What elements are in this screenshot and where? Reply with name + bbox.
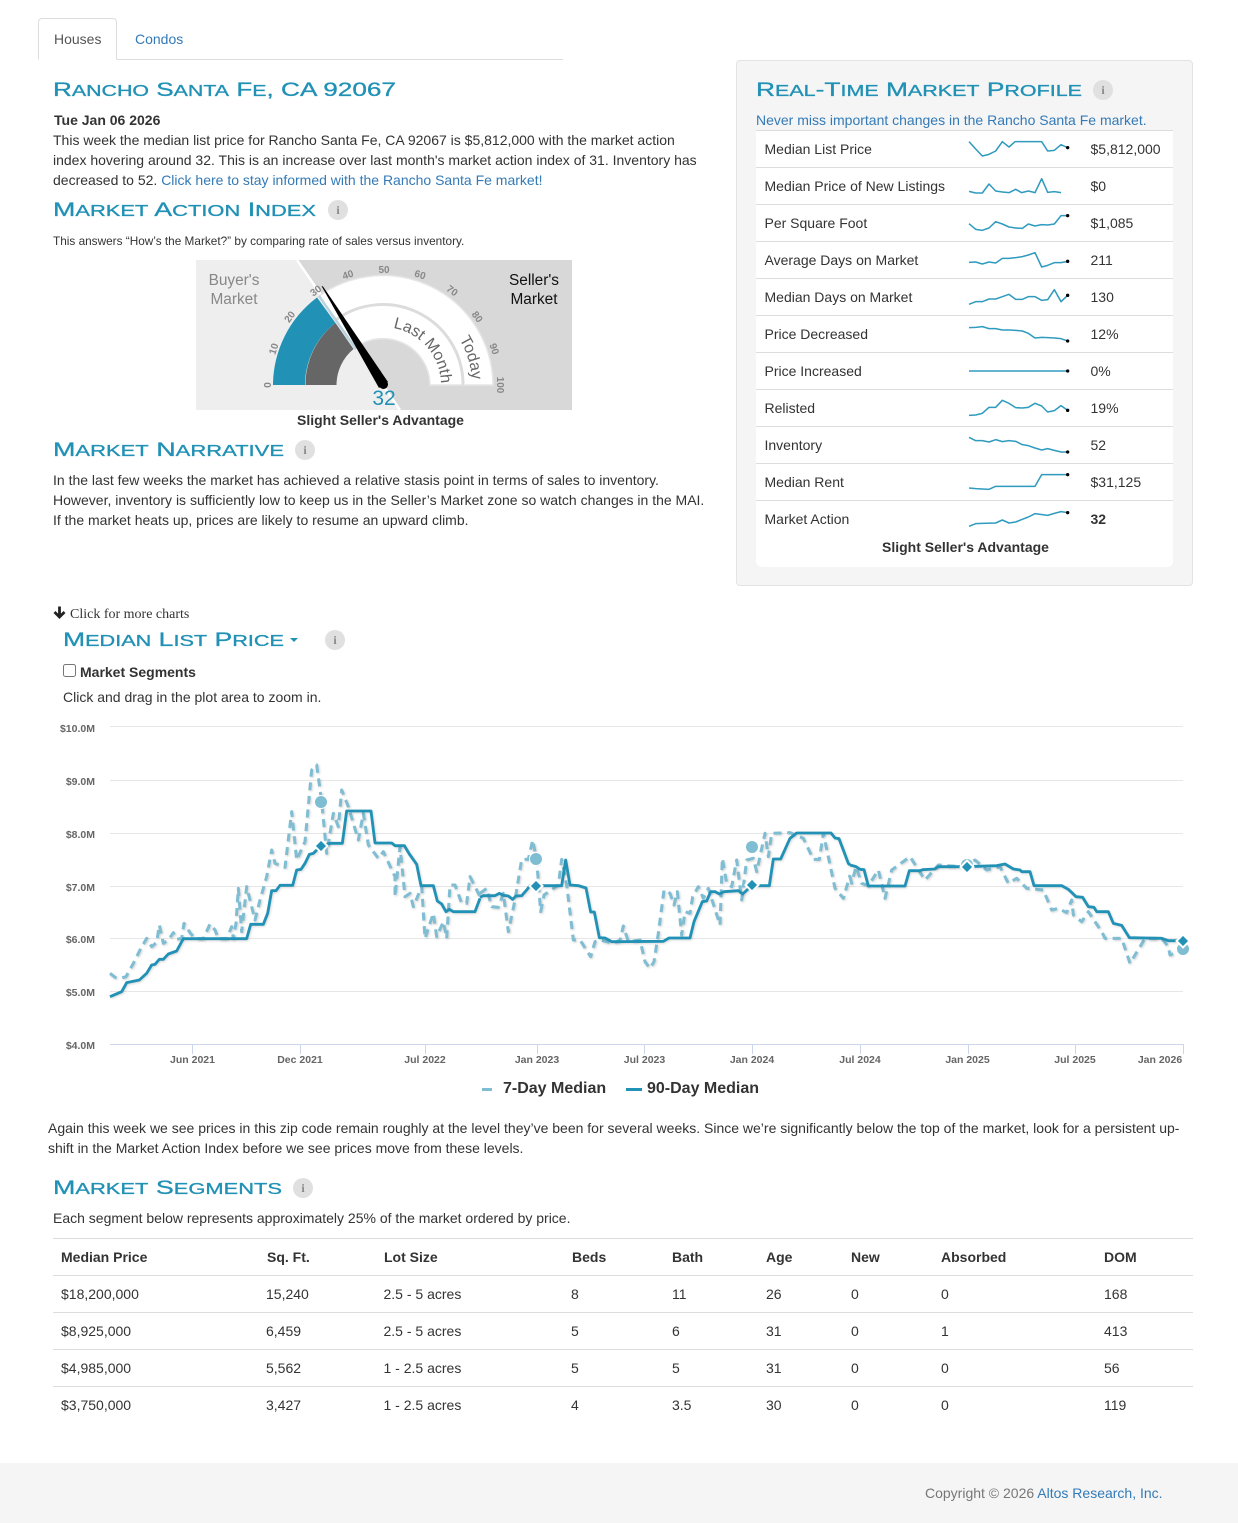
row: per square foot: [756, 204, 1173, 241]
tab: Condos: Condos: [135, 31, 183, 47]
segments description: Each segment below represents approximately 25% of the market ordered by price.: [53, 1210, 570, 1226]
segment row 1: [53, 1275, 1193, 1312]
narrative text: In the last few weeks the market has achieved a relative stasis point in terms of sales to inventory.: [53, 472, 659, 488]
chart commentary: Again this week we see prices in this zip code remain roughly at the level they’ve been for several weeks. Since we’re significantly below the top of the market, look for a persistent up-: [48, 1120, 1179, 1136]
narrative text: If the market heats up, prices are likely to resume an upward climb.: [53, 512, 469, 528]
gauge caption: Slight Seller's Advantage: [297, 412, 464, 428]
profile caption: Slight Seller's Advantage: [882, 539, 1049, 555]
tabs: [38, 18, 563, 60]
icon: info: i: [303, 443, 307, 457]
row: relisted: 19%: [1090, 400, 1119, 416]
y axis labels: $9.0M: [66, 776, 95, 788]
row: median rent: [756, 463, 1173, 500]
segment row 1: 168: [1104, 1286, 1127, 1302]
row: median price of new listings: Median Price of New Listings: [764, 178, 945, 194]
row: median price of new listings: $0: [1090, 178, 1106, 194]
y axis labels: $8.0M: [66, 829, 95, 841]
row: price decreased: [756, 315, 1173, 352]
gray sector: last month: [305, 323, 354, 385]
segment row 1: 0: [851, 1286, 859, 1302]
y axis labels: $4.0M: [66, 1040, 95, 1052]
segment row 1: $18,200,000: [61, 1286, 139, 1302]
series: 90-day median: [110, 811, 1183, 997]
heading: market segments: M ARKET S EGMENTS: [53, 1178, 282, 1199]
tick labels: 50: [378, 265, 390, 276]
x axis labels: Jan 2024: [730, 1054, 774, 1066]
label: seller's market: Market: [510, 291, 558, 308]
table header: [53, 1238, 1193, 1275]
row: inventory: 52: [1090, 437, 1106, 453]
segment row 4: 0: [851, 1397, 859, 1413]
y axis labels: $10.0M: [60, 723, 95, 735]
curved labels: Today: [461, 334, 480, 379]
markers: 7-day median: [314, 796, 1190, 956]
row: median list price: $5,812,000: [1090, 141, 1161, 157]
row: relisted: [756, 389, 1173, 426]
tick labels: 90: [487, 342, 501, 357]
row: price increased: 0%: [1090, 363, 1111, 379]
series: 7-day median: [110, 765, 1183, 978]
segment row 4: 3,427: [266, 1397, 301, 1413]
icon: down arrow: [54, 606, 66, 619]
needle: [322, 286, 388, 388]
row: median price of new listings: [756, 167, 1173, 204]
row: inventory: [756, 426, 1173, 463]
segment row 3: 5: [571, 1360, 579, 1376]
narrative text: [53, 472, 704, 528]
segment row 1: 0: [941, 1286, 949, 1302]
row: relisted: Relisted: [764, 400, 815, 416]
tick labels: 100: [494, 377, 505, 394]
profile table: [756, 130, 1173, 567]
icon: info: i: [333, 633, 337, 647]
title: R ANCHO S ANTA F E, CA 92067: [53, 80, 396, 101]
icon: info: [295, 440, 315, 460]
icon: info: i: [336, 203, 340, 217]
intro text: This week the median list price for Rancho Santa Fe, CA 92067 is $5,812,000 with the market action: [53, 132, 675, 148]
segment row 4: $3,750,000: [61, 1397, 131, 1413]
segment row 3: 1 - 2.5 acres: [384, 1360, 461, 1376]
row: average days on market: 211: [1090, 252, 1113, 268]
y axis labels: [60, 723, 95, 1052]
row: average days on market: [756, 241, 1173, 278]
segment row 4: 3.5: [672, 1397, 691, 1413]
report date: Tue Jan 06 2026: [54, 112, 160, 128]
icon: info: [325, 630, 345, 650]
curved labels: [394, 317, 480, 382]
row: price decreased: Price Decreased: [764, 326, 868, 342]
x axis labels: Jul 2024: [839, 1054, 881, 1066]
segment row 4: 0: [941, 1397, 949, 1413]
line chart: median list price: [60, 723, 1189, 1066]
row: per square foot: Per Square Foot: [764, 215, 867, 231]
x axis labels: [170, 1054, 1182, 1066]
chart commentary: [48, 1120, 1179, 1156]
markers: 90-day median: [314, 840, 1190, 948]
segment row 3: 56: [1104, 1360, 1120, 1376]
segment row 1: 8: [571, 1286, 579, 1302]
footer: Copyright © 2026 Altos Research, Inc.: [925, 1485, 1163, 1501]
row: price decreased: 12%: [1090, 326, 1119, 342]
tick labels: 70: [444, 284, 460, 299]
tick labels: 0: [263, 382, 274, 388]
x axis labels: Jul 2025: [1054, 1054, 1096, 1066]
segment row 3: [53, 1349, 1193, 1386]
table header: Bath: [672, 1249, 703, 1265]
segment row 1: 26: [766, 1286, 782, 1302]
table header: Median Price: [61, 1249, 147, 1265]
label: seller's market: Seller's: [509, 272, 559, 289]
tick labels: [263, 265, 505, 394]
gauge value: 32: [372, 387, 396, 410]
icon: info: [293, 1178, 313, 1198]
x axis labels: Jul 2022: [404, 1054, 446, 1066]
table: market segments: [53, 1238, 1193, 1413]
segment row 4: [53, 1386, 1193, 1423]
table header: Lot Size: [384, 1249, 438, 1265]
tick labels: 40: [341, 268, 356, 282]
label: buyer's market: Market: [210, 291, 258, 308]
row: inventory: Inventory: [764, 437, 822, 453]
tab: Houses: Houses: [54, 31, 101, 47]
table header: New: [851, 1249, 880, 1265]
gauge: market action index: [196, 260, 572, 410]
click for more charts: Click for more charts: [70, 607, 189, 622]
heading: market narrative: M ARKET N ARRATIVE: [53, 440, 284, 461]
x axis labels: Dec 2021: [277, 1054, 323, 1066]
row: median list price: Median List Price: [764, 141, 872, 157]
x axis labels: Jan 2023: [515, 1054, 559, 1066]
description: This answers “How’s the Market?” by comparing rate of sales versus inventory.: [53, 234, 464, 248]
segment row 3: 5: [672, 1360, 680, 1376]
row: market action: [756, 500, 1173, 537]
row: median days on market: 130: [1090, 289, 1114, 305]
row: median rent: $31,125: [1090, 474, 1141, 490]
footer: [0, 1463, 1238, 1523]
segment row 2: 0: [851, 1323, 859, 1339]
table header: Beds: [572, 1249, 606, 1265]
row: market action: Market Action: [764, 511, 849, 527]
chart hint: Click and drag in the plot area to zoom in.: [63, 689, 321, 705]
tick labels: 60: [413, 269, 427, 283]
segment row 2: 6: [672, 1323, 680, 1339]
tick labels: 10: [268, 342, 282, 356]
y axis labels: $7.0M: [66, 882, 95, 894]
intro text: index hovering around 32. This is an increase over last month's market action index of 31. Inventory has: [53, 152, 697, 168]
narrative text: However, inventory is sufficiently low to keep us in the Seller’s Market zone so watch changes in the MAI.: [53, 492, 704, 508]
table header: Sq. Ft.: [267, 1249, 310, 1265]
row: price increased: [756, 352, 1173, 389]
heading: median list price: M EDIAN L IST P RICE: [63, 630, 284, 651]
segment row 4: 4: [571, 1397, 579, 1413]
link: never miss changes: Never miss important changes in the Rancho Santa Fe market.: [756, 112, 1147, 128]
tick labels: 80: [469, 310, 485, 325]
x axis labels: Jan 2025: [945, 1054, 990, 1066]
segment row 2: 2.5 - 5 acres: [384, 1323, 461, 1339]
label: buyer's market: Buyer's: [209, 272, 260, 289]
row: price increased: Price Increased: [764, 363, 862, 379]
tick labels: 30: [309, 283, 324, 299]
tab: Houses: [38, 18, 117, 60]
segment row 3: $4,985,000: [61, 1360, 131, 1376]
segment row 2: [53, 1312, 1193, 1349]
row: median rent: Median Rent: [764, 474, 844, 490]
checkbox: market segments: Market Segments: [80, 664, 196, 680]
segment row 2: 6,459: [266, 1323, 301, 1339]
x axis labels: Jan 2026: [1138, 1054, 1182, 1066]
segment row 1: 2.5 - 5 acres: [384, 1286, 461, 1302]
segment row 3: 0: [851, 1360, 859, 1376]
y axis labels: $5.0M: [66, 987, 95, 999]
icon: info: [1093, 80, 1113, 100]
tick labels: 20: [283, 309, 298, 325]
curved labels: Last Month: [394, 317, 452, 382]
segment row 2: 413: [1104, 1323, 1127, 1339]
y axis labels: $6.0M: [66, 934, 95, 946]
table header: DOM: [1104, 1249, 1137, 1265]
segment row 2: 1: [941, 1323, 949, 1339]
segment row 3: 5,562: [266, 1360, 301, 1376]
row: average days on market: Average Days on Market: [764, 252, 918, 268]
segment row 4: 30: [766, 1397, 782, 1413]
segment row 3: 31: [766, 1360, 782, 1376]
segment row 2: $8,925,000: [61, 1323, 131, 1339]
intro text: decreased to 52. Click here to stay informed with the Rancho Santa Fe market!: [53, 172, 542, 188]
row: per square foot: $1,085: [1090, 215, 1133, 231]
table header: Absorbed: [941, 1249, 1006, 1265]
icon: info: i: [301, 1181, 305, 1195]
row: market action: 32: [1090, 511, 1106, 527]
icon: info: i: [1101, 83, 1105, 97]
segment row 1: 11: [672, 1286, 687, 1302]
chart legend: 90-Day Median: [647, 1080, 759, 1097]
segment row 2: 31: [766, 1323, 782, 1339]
segment row 4: 119: [1104, 1397, 1126, 1413]
chart legend: 7-Day Median: [503, 1080, 606, 1097]
chart legend: [482, 1080, 759, 1097]
chart commentary: shift in the Market Action Index before we see prices move from these levels.: [48, 1140, 523, 1156]
intro text: [53, 132, 697, 188]
row: median list price: [756, 130, 1173, 167]
table header: Age: [766, 1249, 792, 1265]
heading: real-time market profile: R EAL -T IME M ARKET P ROFILE: [756, 80, 1082, 101]
row: median days on market: [756, 278, 1173, 315]
heading: market action index: M ARKET A CTION I NDEX: [53, 200, 317, 221]
row: median days on market: Median Days on Market: [764, 289, 912, 305]
blue sector: today: [273, 298, 336, 385]
segment row 4: 1 - 2.5 acres: [384, 1397, 461, 1413]
segment row 2: 5: [571, 1323, 579, 1339]
icon: info: [328, 200, 348, 220]
x axis labels: Jul 2023: [624, 1054, 665, 1066]
x axis labels: Jun 2021: [170, 1054, 215, 1066]
segment row 1: 15,240: [266, 1286, 309, 1302]
segment row 3: 0: [941, 1360, 949, 1376]
panel: real-time market profile: [736, 60, 1193, 586]
